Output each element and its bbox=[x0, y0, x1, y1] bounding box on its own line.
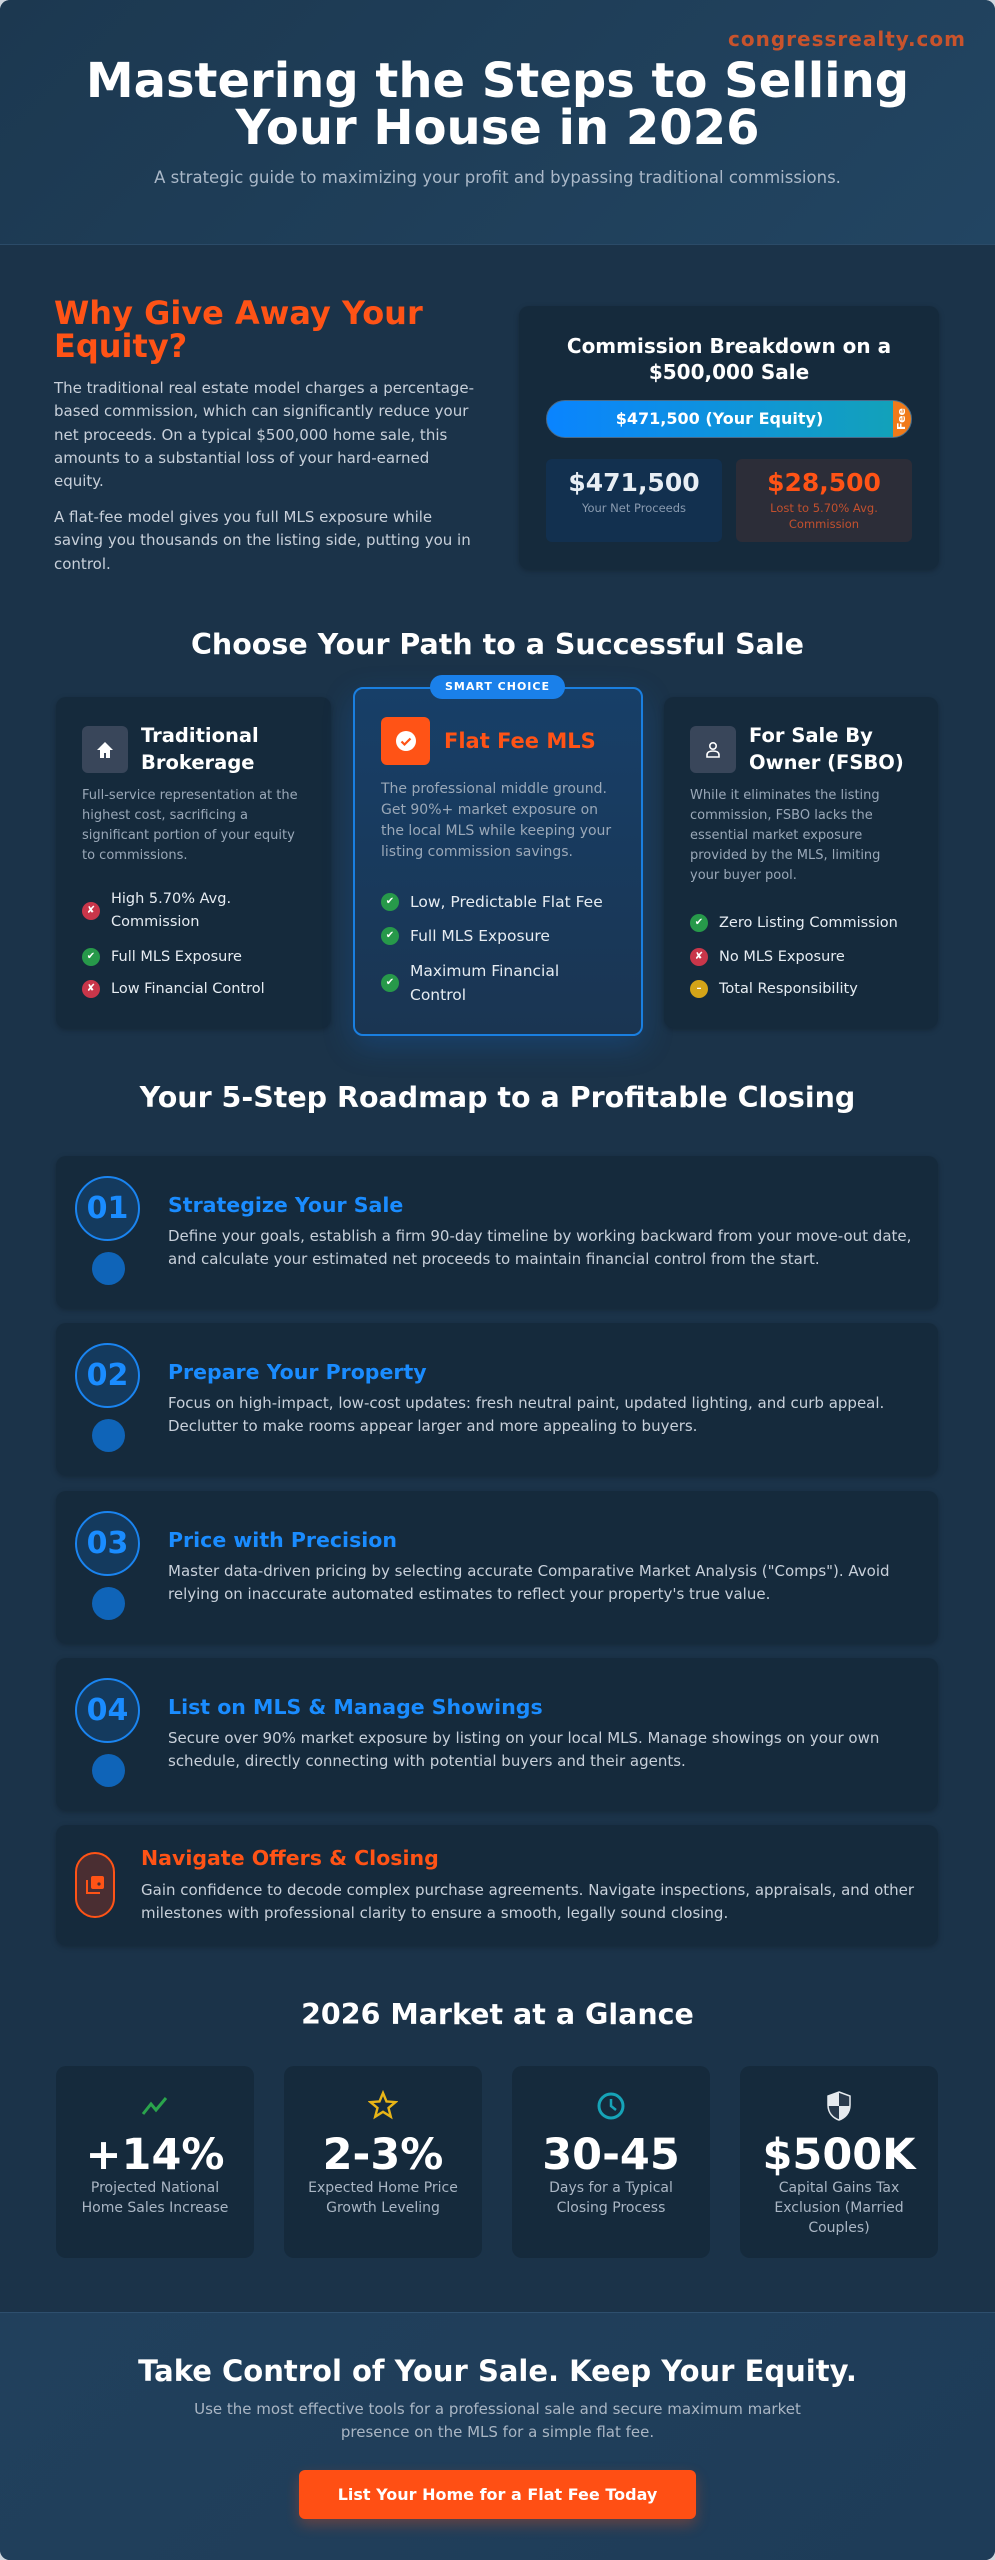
stat: closing days bbox=[512, 2066, 710, 2258]
title bbox=[86, 53, 909, 156]
step 4: 04 bbox=[87, 1693, 128, 1728]
stat: lost commission: Lost to 5.70% Avg. Commission bbox=[770, 501, 878, 531]
icon: house bbox=[82, 726, 128, 773]
card title: $500,000 Sale bbox=[649, 360, 809, 384]
item: high commission: Commission bbox=[111, 914, 199, 930]
site name: congressrealty.com bbox=[728, 27, 966, 51]
card title: Commission Breakdown on a bbox=[567, 334, 891, 358]
stat: net proceeds: $471,500 bbox=[568, 468, 700, 497]
step 1: Define your goals, establish a firm 90-day timeline by working backward from your move-out date, and calculate your estimated net proceeds to maintain financial control from the start. bbox=[168, 1227, 911, 1268]
badge: smart choice: SMART CHOICE bbox=[445, 680, 550, 693]
card title bbox=[567, 334, 891, 384]
heading: why give away your equity bbox=[54, 294, 423, 365]
card title: Owner (FSBO) bbox=[749, 751, 904, 774]
icon: person bbox=[690, 726, 736, 773]
panel: commission breakdown bbox=[519, 306, 939, 569]
card description: Full-service representation at the highest cost, sacrificing a significant portion of your equity to commissions. bbox=[82, 788, 298, 863]
stat: lost commission bbox=[736, 459, 912, 542]
item: high commission bbox=[82, 891, 231, 930]
button: List Your Home for a Flat Fee Today bbox=[338, 2485, 657, 2504]
step 5: Gain confidence to decode complex purchase agreements. Navigate inspections, appraisals, and other milestones with professional clarity to ensure a smooth, legally sound closing. bbox=[141, 1880, 914, 1922]
cta title: Take Control of Your Sale. Keep Your Equity. bbox=[138, 2354, 857, 2388]
button bbox=[299, 2470, 696, 2519]
step 3: Price with Precision bbox=[168, 1528, 397, 1552]
item: no mls: No MLS Exposure bbox=[719, 948, 845, 964]
card title: For Sale By bbox=[749, 724, 873, 747]
heading: roadmap: Your 5-Step Roadmap to a Profitable Closing bbox=[140, 1081, 855, 1114]
step 4: List on MLS & Manage Showings bbox=[168, 1695, 543, 1719]
item: full mls: ✔ bbox=[87, 951, 95, 962]
step 3: Master data-driven pricing by selecting accurate Comparative Market Analysis ("Comps"). Avoid relying on inaccurate automated estimates to reflect your property's true value. bbox=[168, 1562, 890, 1603]
step 3 bbox=[56, 1491, 938, 1643]
panel: flat fee mls bbox=[353, 687, 643, 1036]
item: full mls: Full MLS Exposure bbox=[410, 926, 550, 944]
step 1: 01 bbox=[87, 1191, 128, 1226]
title: Your House in 2026 bbox=[236, 100, 759, 156]
stat: lost commission: $28,500 bbox=[767, 468, 881, 497]
subtitle: A strategic guide to maximizing your profit and bypassing traditional commissions. bbox=[154, 168, 841, 187]
item: flat fee: ✔ bbox=[386, 896, 394, 907]
stat: closing days: Days for a Typical Closing Process bbox=[549, 2180, 673, 2216]
stat: price growth: 2-3% bbox=[323, 2130, 443, 2180]
text: equity explanation: The traditional real estate model charges a percentage-based commission, which can significantly reduce your net proceeds. On a typical $500,000 home sale, this amounts to a substantial loss of your hard-earned equity. bbox=[54, 379, 474, 490]
step 5: Navigate Offers & Closing bbox=[141, 1846, 439, 1870]
stat: sales increase: +14% bbox=[86, 2130, 224, 2180]
stat: capital gains: $500K bbox=[762, 2130, 916, 2180]
step 5 bbox=[56, 1825, 938, 1945]
bar chart: equity vs fee: Fee bbox=[895, 408, 908, 430]
card title: Flat Fee MLS bbox=[444, 729, 596, 753]
card title: Brokerage bbox=[141, 751, 255, 774]
item: low control: ✘ bbox=[87, 983, 95, 994]
item: full mls: ✔ bbox=[386, 930, 394, 941]
item: zero commission: Zero Listing Commission bbox=[719, 914, 898, 930]
step 1: Strategize Your Sale bbox=[168, 1193, 403, 1217]
item: no mls: ✘ bbox=[695, 951, 703, 962]
item: full mls: Full MLS Exposure bbox=[111, 948, 242, 964]
title: Mastering the Steps to Selling bbox=[86, 53, 909, 109]
panel: traditional brokerage bbox=[56, 697, 331, 1028]
text: flat fee: A flat-fee model gives you full MLS exposure while saving you thousands on the listing side, putting you in control. bbox=[54, 508, 471, 573]
item: high commission: ✘ bbox=[87, 905, 95, 916]
item: high commission: High 5.70% Avg. bbox=[111, 891, 231, 907]
step 4 bbox=[56, 1658, 938, 1810]
stat: capital gains: Capital Gains Tax Exclusion (Married Couples) bbox=[774, 2180, 904, 2236]
card description: While it eliminates the listing commission, FSBO lacks the essential market exposure provided by the MLS, limiting your buyer pool. bbox=[690, 788, 880, 883]
card title bbox=[749, 724, 904, 774]
stat: net proceeds: Your Net Proceeds bbox=[582, 501, 686, 515]
step 2 bbox=[56, 1323, 938, 1475]
panel: fsbo bbox=[664, 697, 938, 1028]
stat: closing days: 30-45 bbox=[542, 2130, 680, 2180]
header bbox=[0, 0, 995, 245]
item: max control bbox=[381, 962, 559, 1004]
stat: capital gains bbox=[740, 2066, 938, 2258]
badge: smart choice bbox=[430, 675, 565, 699]
item: flat fee: Low, Predictable Flat Fee bbox=[410, 892, 603, 910]
stat: price growth: Expected Home Price Growth Leveling bbox=[308, 2180, 458, 2216]
step 4: Secure over 90% market exposure by listing on your local MLS. Manage showings on your own schedule, directly connecting with potential buyers and their agents. bbox=[168, 1729, 879, 1770]
bar chart: equity vs fee bbox=[546, 400, 912, 438]
step 2: Focus on high-impact, low-cost updates: fresh neutral paint, updated lighting, and curb appeal. Declutter to make rooms appear larger and more appealing to buyers. bbox=[168, 1394, 884, 1435]
item: max control: Maximum Financial bbox=[410, 962, 559, 980]
card description: The professional middle ground. Get 90%+ market exposure on the local MLS while keeping your listing commission savings. bbox=[381, 780, 611, 860]
bar chart: equity vs fee: $471,500 (Your Equity) bbox=[616, 409, 823, 428]
step 2: 02 bbox=[87, 1358, 128, 1393]
icon: check bbox=[381, 717, 430, 765]
stat: price growth bbox=[284, 2066, 482, 2258]
step 3: 03 bbox=[87, 1526, 128, 1561]
item: total responsibility: Total Responsibility bbox=[719, 980, 858, 996]
item: max control: Control bbox=[410, 986, 466, 1004]
footer: call to action bbox=[0, 2312, 995, 2560]
step 1 bbox=[56, 1156, 938, 1308]
heading: choose your path: Choose Your Path to a Successful Sale bbox=[191, 628, 804, 661]
item: low control: Low Financial Control bbox=[111, 980, 265, 996]
item: zero commission: ✔ bbox=[695, 917, 703, 928]
stat: sales increase: Projected National Home Sales Increase bbox=[82, 2180, 228, 2216]
stat: sales increase bbox=[56, 2066, 254, 2258]
heading: why give away your equity: Why Give Away Your bbox=[54, 294, 423, 332]
step 2: Prepare Your Property bbox=[168, 1360, 427, 1384]
item: max control: ✔ bbox=[386, 977, 394, 988]
stat: net proceeds bbox=[546, 459, 722, 542]
card title bbox=[141, 724, 259, 774]
cta text: Use the most effective tools for a professional sale and secure maximum market presence on the MLS for a simple flat fee. bbox=[194, 2400, 801, 2440]
icon: documents bbox=[75, 1852, 115, 1918]
item: total responsibility: – bbox=[696, 983, 702, 994]
card title: Traditional bbox=[141, 724, 259, 747]
heading: market at a glance: 2026 Market at a Glance bbox=[301, 1998, 694, 2031]
heading: why give away your equity: Equity? bbox=[54, 327, 187, 365]
